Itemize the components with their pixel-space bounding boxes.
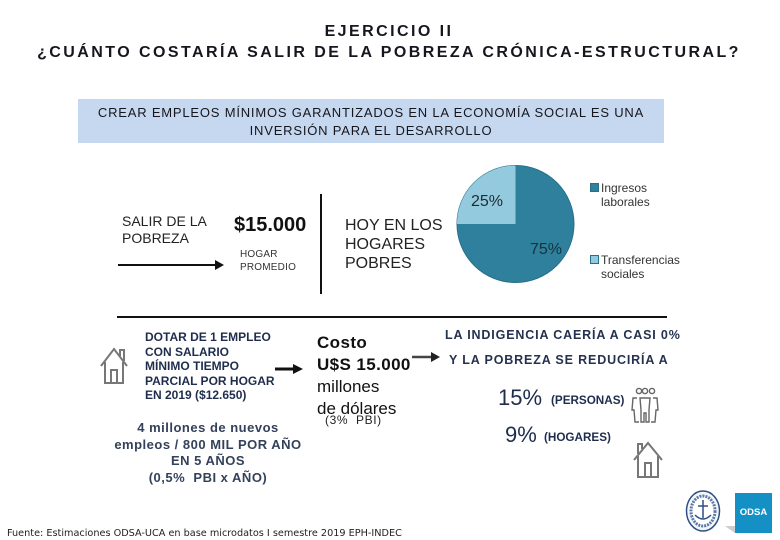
arrow: to result <box>412 352 440 362</box>
text: personas: (PERSONAS) <box>551 394 624 407</box>
legend: transferencias sociales <box>590 253 680 281</box>
text: nuevos empleos: EN 5 AÑOS <box>171 453 245 468</box>
text: costo: de dólares <box>317 399 396 418</box>
text: pobreza: Y LA POBREZA SE REDUCIRÍA A <box>449 353 668 367</box>
text: nuevos empleos: 4 millones de nuevos <box>137 420 279 435</box>
legend: ingresos laborales: laborales <box>601 195 650 209</box>
text: hogar promedio: PROMEDIO <box>240 262 296 273</box>
text: salir de la pobreza <box>122 213 207 246</box>
banner: INVERSIÓN PARA EL DESARROLLO <box>250 123 492 138</box>
legend: ingresos laborales: Ingresos <box>601 181 647 195</box>
text: costo: millones <box>317 377 379 396</box>
text: hogar promedio <box>240 249 296 273</box>
legend: ingresos laborales <box>590 181 650 209</box>
title: ¿CUÁNTO COSTARÍA SALIR DE LA POBREZA CRÓNICA-ESTRUCTURAL? <box>37 44 741 61</box>
label: 75%: 75% <box>530 241 562 258</box>
stat: 15%: 15% <box>498 385 542 410</box>
banner <box>78 99 664 143</box>
stat: 9%: 9% <box>505 422 537 447</box>
arrow: to cost <box>275 364 303 374</box>
logo: odsa: ODSA <box>740 507 767 518</box>
text: dotar de 1 empleo: CON SALARIO <box>145 344 229 358</box>
text: hogares: (HOGARES) <box>544 431 611 444</box>
text: hoy en los hogares: HOY EN LOS <box>345 217 443 234</box>
title: EJERCICIO II <box>325 23 453 40</box>
icon: house right <box>633 442 663 478</box>
icon: house left <box>100 348 128 384</box>
text: nuevos empleos <box>114 420 302 484</box>
text: costo: U$S 15.000 <box>317 355 411 374</box>
pie chart <box>456 165 574 283</box>
legend: transferencias sociales: Transferencias <box>601 253 680 267</box>
text: 3% pbi: (3% PBI) <box>325 413 382 427</box>
text: dotar de 1 empleo: EN 2019 ($12.650) <box>145 388 246 402</box>
horizontal divider <box>117 316 667 318</box>
vertical divider <box>320 194 322 294</box>
text: dotar de 1 empleo: PARCIAL POR HOGAR <box>145 374 275 388</box>
arrow: salir <box>118 260 224 270</box>
text: nuevos empleos: (0,5% PBI x AÑO) <box>149 470 267 484</box>
amount: $15.000 <box>234 214 306 236</box>
text: dotar de 1 empleo: DOTAR DE 1 EMPLEO <box>145 330 271 344</box>
text: costo <box>317 333 411 418</box>
text: hoy en los hogares <box>345 217 443 272</box>
text: dotar de 1 empleo <box>145 330 275 402</box>
icon: people <box>631 388 659 423</box>
logo: seal <box>686 490 720 532</box>
text: indigencia: LA INDIGENCIA CAERÍA A CASI 0% <box>445 328 681 342</box>
source note: Fuente: Estimaciones ODSA-UCA en base microdatos I semestre 2019 EPH-INDEC <box>7 528 402 539</box>
text: costo: Costo <box>317 333 367 352</box>
legend: transferencias sociales: sociales <box>601 267 644 281</box>
banner: CREAR EMPLEOS MÍNIMOS GARANTIZADOS EN LA ECONOMÍA SOCIAL ES UNA <box>98 105 644 120</box>
text: salir de la pobreza: SALIR DE LA <box>122 213 207 229</box>
text: dotar de 1 empleo: MÍNIMO TIEMPO <box>145 359 239 373</box>
text: hoy en los hogares: POBRES <box>345 255 412 272</box>
text: salir de la pobreza: POBREZA <box>122 230 189 246</box>
label: 25%: 25% <box>471 193 503 210</box>
logo: odsa <box>725 493 772 533</box>
text: hoy en los hogares: HOGARES <box>345 236 425 253</box>
text: hogar promedio: HOGAR <box>240 249 278 260</box>
title <box>37 23 741 61</box>
text: nuevos empleos: empleos / 800 MIL POR AÑO <box>114 436 302 452</box>
